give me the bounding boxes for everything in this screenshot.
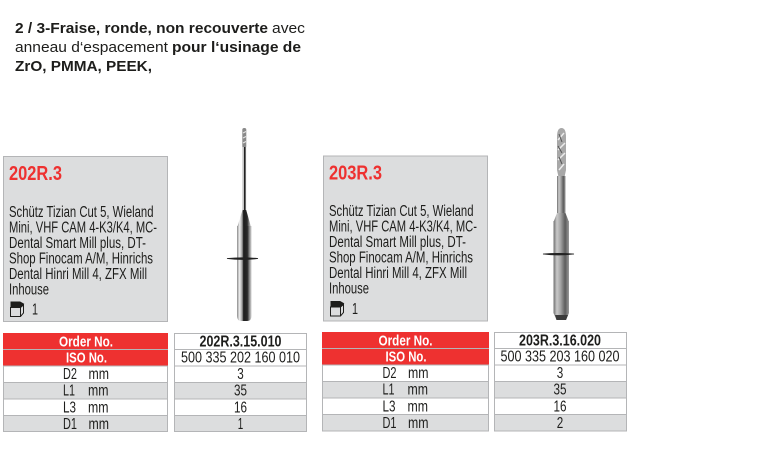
table: 202R.3 labels: mm: [88, 400, 108, 416]
compatible machines text: Schütz Tizian Cut 5, Wieland: [329, 203, 474, 220]
table: 202R.3 labels: D2: [63, 366, 77, 383]
table: 203R.3 values: 3: [557, 365, 563, 382]
compatible machines text: Dental Smart Mill plus, DT-: [329, 234, 466, 251]
table: 203R.3 labels: mm: [408, 382, 428, 399]
table: 202R.3 labels: mm: [88, 383, 108, 400]
compatible machines text: Mini, VHF CAM 4-K3/K4, MC-: [9, 220, 157, 236]
compatible machines text: [9, 204, 157, 298]
table: 203R.3 values: [494, 332, 626, 432]
table: 202R.3 values: 16: [234, 400, 247, 416]
package quantity: 1: [32, 302, 38, 318]
table: 202R.3 labels: mm: [88, 366, 109, 383]
table: 202R.3 values: 202R.3.15.010: [200, 334, 282, 350]
compatible machines text: Dental Hinri Mill 4, ZFX Mill: [9, 266, 147, 283]
table: 202R.3 labels: L3: [63, 400, 76, 416]
product title 202R.3: 202R.3: [9, 162, 62, 185]
table: 203R.3 values: 16: [554, 398, 566, 416]
heading: avec: [272, 21, 305, 37]
icon: bur 203R.3: [543, 128, 574, 320]
table: 202R.3 labels: L1: [63, 383, 75, 400]
icon: package: [330, 302, 344, 316]
compatible machines text: [329, 203, 477, 298]
heading: ZrO, PMMA, PEEK,: [15, 59, 152, 75]
panel: 203R.3 description: [324, 156, 488, 321]
compatible machines text: Dental Hinri Mill 4, ZFX Mill: [329, 265, 467, 282]
table: 202R.3 values: 3: [237, 366, 244, 383]
compatible machines text: Dental Smart Mill plus, DT-: [9, 235, 146, 252]
table: 202R.3 labels: [3, 333, 168, 433]
compatible machines text: Schütz Tizian Cut 5, Wieland: [9, 204, 154, 221]
table: 203R.3 labels: [322, 332, 489, 432]
product title 203R.3: 203R.3: [329, 162, 382, 184]
table: 202R.3 values: 35: [234, 383, 247, 400]
compatible machines text: Mini, VHF CAM 4-K3/K4, MC-: [329, 218, 477, 236]
table: 203R.3 labels: mm: [408, 365, 428, 382]
table: 203R.3 labels: mm: [408, 415, 428, 432]
icon: package: [10, 302, 24, 316]
table: 202R.3 labels: Order No.: [59, 334, 113, 350]
table: 202R.3 labels: mm: [88, 416, 109, 433]
compatible machines text: Inhouse: [329, 280, 369, 298]
table: 202R.3 labels: D1: [63, 416, 77, 433]
table: 203R.3 labels: L1: [382, 382, 394, 399]
table: 203R.3 labels: L3: [382, 398, 396, 416]
table: 202R.3 labels: ISO No.: [66, 350, 107, 366]
table: 203R.3 labels: ISO No.: [386, 348, 426, 366]
compatible machines text: Inhouse: [9, 282, 49, 298]
heading: anneau d‘espacement: [15, 40, 168, 56]
table: 203R.3 labels: mm: [408, 398, 428, 416]
table: 203R.3 labels: Order No.: [378, 332, 432, 350]
table: 203R.3 values: 203R.3.16.020: [519, 332, 601, 350]
compatible machines text: Shop Finocam A/M, Hinrichs: [329, 250, 473, 266]
heading: [15, 21, 305, 75]
table: 203R.3 values: 500 335 203 160 020: [500, 348, 620, 366]
table: 202R.3 values: 500 335 202 160 010: [181, 350, 300, 366]
heading: pour l‘usinage de: [172, 40, 301, 56]
table: 203R.3 values: 35: [554, 382, 566, 399]
package quantity: 1: [352, 301, 358, 318]
table: 203R.3 labels: D1: [382, 415, 396, 432]
table: 203R.3 labels: D2: [382, 365, 396, 382]
heading: 2 / 3-Fraise, ronde, non recouverte: [15, 21, 268, 37]
table: 202R.3 values: [174, 334, 306, 433]
table: 203R.3 values: 2: [557, 415, 563, 432]
panel: 202R.3 description: [4, 156, 168, 322]
icon: bur 202R.3: [227, 128, 258, 321]
table: 202R.3 values: 1: [238, 416, 243, 433]
compatible machines text: Shop Finocam A/M, Hinrichs: [9, 250, 153, 268]
